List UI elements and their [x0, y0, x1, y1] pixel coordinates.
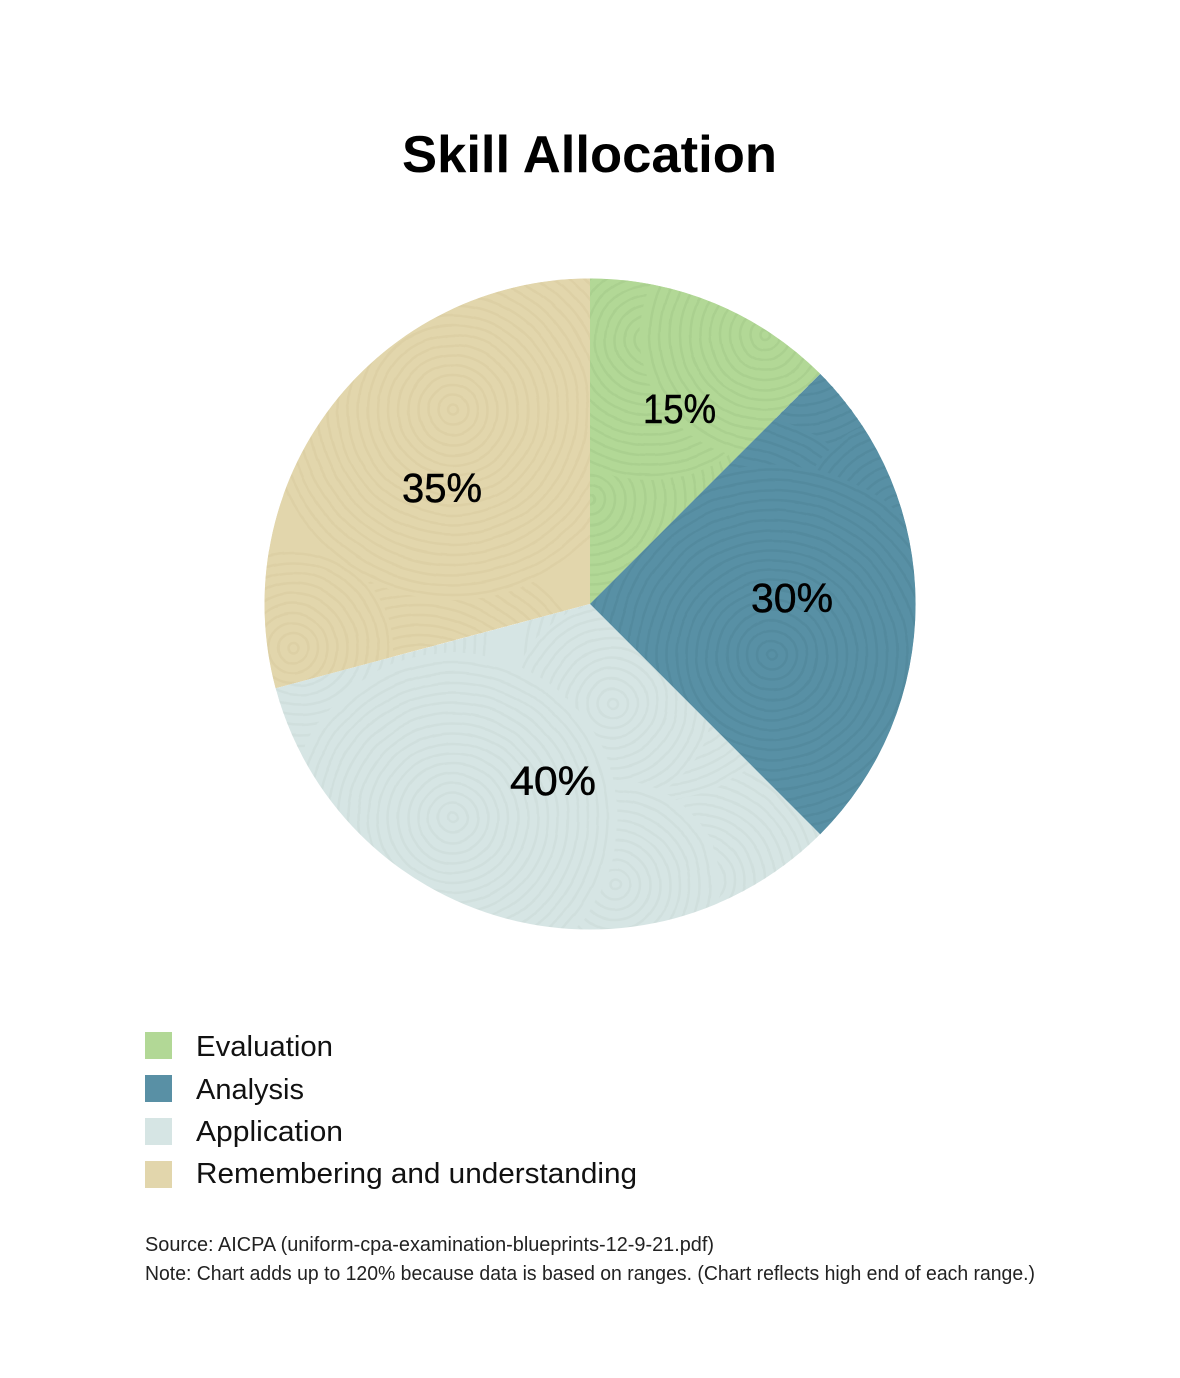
legend item: Analysis: [145, 1074, 304, 1106]
slice: Remembering and understanding 35%: [264, 278, 590, 688]
label: 15%: 15%: [643, 386, 716, 432]
slice: Application 40%: [276, 604, 820, 930]
chart note: Note: Chart adds up to 120% because data is based on ranges. (Chart reflects high end of each range.): [145, 1263, 1035, 1285]
legend item: Remembering and understanding: Remembering and understanding: [196, 1158, 637, 1190]
legend item: Application: Application: [196, 1116, 343, 1148]
source note: Source: AICPA (uniform-cpa-examination-blueprints-12-9-21.pdf): [145, 1234, 714, 1256]
label: 40%: 40%: [510, 758, 596, 804]
legend: [145, 1031, 637, 1190]
label: 30%: 30%: [751, 575, 833, 621]
slice: Evaluation 15%: [590, 278, 820, 604]
legend item: Evaluation: Evaluation: [196, 1031, 333, 1063]
slice: Analysis 30%: [590, 374, 916, 834]
pie chart: [264, 278, 916, 930]
legend item: Analysis: Analysis: [196, 1074, 304, 1106]
title: Skill Allocation: [402, 126, 777, 184]
label: 35%: 35%: [402, 465, 482, 511]
